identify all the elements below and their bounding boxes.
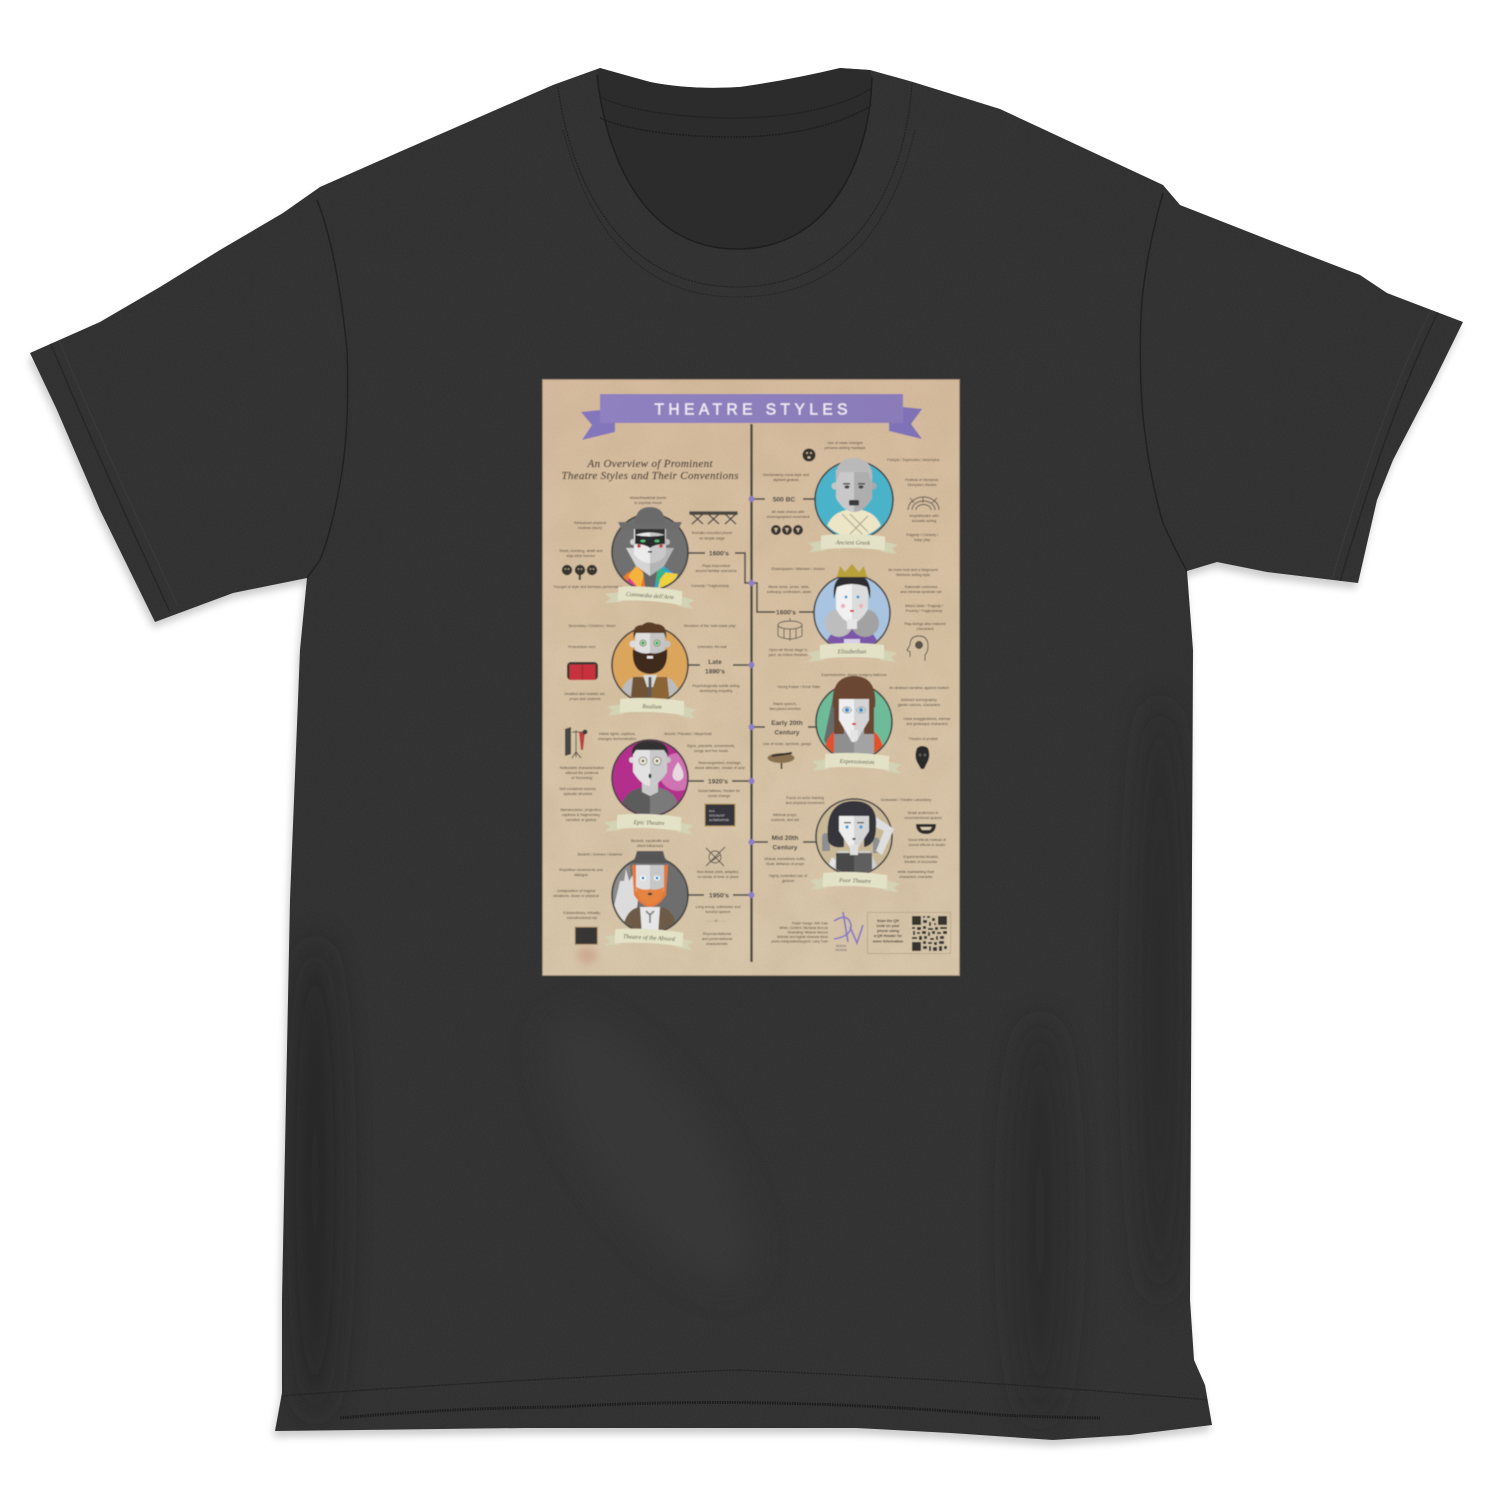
date labels: Mid 20th xyxy=(772,835,798,842)
text: realism conventions: Proscenium arch xyxy=(568,645,596,649)
text: expressionism conventions: Georg Kaiser / Ernst Toller xyxy=(777,685,821,689)
text: poor theatre conventions: while maintaining their xyxy=(898,870,935,874)
style: Poor Theatre xyxy=(816,799,894,877)
text: elizabethan conventions: characters xyxy=(916,627,934,631)
text: greek conventions: stylised gesture xyxy=(773,478,799,482)
icon: three masks xyxy=(562,565,597,580)
style: Commedia dell'Arte xyxy=(612,507,688,592)
text: realism conventions: Secondary / Chekhov / Ibsen xyxy=(568,624,616,628)
text: realism conventions xyxy=(564,624,739,701)
date labels xyxy=(705,496,803,900)
text: greek conventions: Festival of Dionysus; xyxy=(905,478,939,482)
subtitle: An Overview of Prominent xyxy=(586,458,713,470)
text: commedia conventions: slap-stick humour xyxy=(567,554,596,558)
style: Ancient Greek xyxy=(815,458,893,540)
text: epic conventions: Narrator/actor, projection, xyxy=(560,808,602,812)
ribbon: Realism: Realism xyxy=(641,704,662,711)
text: greek conventions: choreographed movement xyxy=(766,515,810,519)
text: absurd conventions: silent influences xyxy=(637,844,663,848)
date labels: Century xyxy=(773,844,798,852)
ribbon: Ancient Greek xyxy=(808,533,898,554)
credits: Poster Design: Will Tuan xyxy=(792,922,828,926)
text: epic conventions xyxy=(559,732,746,822)
text: poor theatre conventions: Grotowski / Theatre Laboratory xyxy=(881,798,932,802)
text: absurd conventions: characteristic xyxy=(706,942,728,946)
text: absurd conventions: - - - - /// - - - - xyxy=(705,919,727,923)
text: expressionism conventions xyxy=(763,685,950,746)
QR panel xyxy=(868,912,950,954)
text: expressionism conventions: fast-paced emotion xyxy=(769,707,801,711)
text: epic conventions: Rearrangement, montage, xyxy=(698,761,742,765)
text: absurd conventions: no sense of time or place xyxy=(697,875,739,879)
logo: drama victoria: drama xyxy=(836,944,846,948)
text: commedia conventions: Rehearsed physical xyxy=(574,521,606,525)
date labels: 1950's xyxy=(709,892,729,900)
text: epic conventions: narrative or gestus xyxy=(566,818,596,822)
date labels: 1600's xyxy=(709,550,729,558)
QR instructions: a QR Reader for xyxy=(874,934,903,938)
text: absurd conventions: Beckett, vaudeville and xyxy=(631,839,669,843)
ribbon: Poor Theatre: Poor Theatre xyxy=(838,878,871,885)
icon: blackboard: ALTERNATIVE xyxy=(709,818,729,822)
ribbon: Epic Theatre: Epic Theatre xyxy=(632,820,665,827)
text: poor theatre conventions: sound effects in studio xyxy=(909,843,945,847)
timeline xyxy=(688,424,816,962)
text: epic conventions: Visible lights, captions, xyxy=(598,732,636,736)
date labels: 500 BC xyxy=(773,496,795,504)
style: Expressionism xyxy=(816,676,892,762)
text: epic conventions: Signs, placards, screenshots, xyxy=(687,744,735,748)
icon: black curtain xyxy=(575,927,598,944)
stage icon: trestle xyxy=(690,512,737,524)
text: epic conventions: songs and live music xyxy=(694,749,728,753)
text: poor theatre conventions: Minimal props, xyxy=(773,813,797,817)
ribbon: Theatre of the Absurd xyxy=(604,927,694,950)
logo: drama victoria: victoria xyxy=(835,948,847,952)
text: greek conventions: Amphitheatre with xyxy=(909,514,939,518)
text: realism conventions: Psychologically subtle acting xyxy=(693,684,739,688)
text: elizabethan conventions: Elaborate costumes xyxy=(905,585,937,589)
ribbon: Expressionism xyxy=(812,751,902,774)
text: elizabethan conventions: Blank verse, prose, wide, xyxy=(768,585,810,589)
text: elizabethan conventions: As more rock and a fairground xyxy=(888,568,938,572)
text: greek conventions: Dionysia's theatre xyxy=(907,483,937,487)
icon: mouth xyxy=(916,824,936,834)
text: absurd conventions: forceful speech xyxy=(705,910,731,914)
style: Elizabethan xyxy=(814,564,890,653)
text: poor theatre conventions: costume, and set xyxy=(771,818,799,822)
icon: red curtain xyxy=(567,662,598,680)
text: commedia conventions: Bunraku mounted phone xyxy=(692,531,732,535)
text: epic conventions: shock attitudes, 'choice of acts' xyxy=(695,766,746,770)
text: epic conventions: episodic structure xyxy=(564,792,592,796)
icon: gong xyxy=(768,753,794,769)
icon: greek masks xyxy=(771,525,803,535)
text: poor theatre conventions: characters character xyxy=(899,875,934,879)
text: expressionism conventions: Clear exaggerations, intense xyxy=(904,717,950,721)
text: commedia conventions: Stock, mocking, death and xyxy=(559,549,603,553)
text: epic conventions: Social tableau; theatre for xyxy=(698,789,741,793)
icon: tragic mask xyxy=(802,448,816,462)
logo: drama victoria xyxy=(834,912,863,952)
title banner xyxy=(581,394,922,440)
credits: Website and logistic Amanda Moss xyxy=(777,935,828,939)
style: Theatre of the Absurd xyxy=(612,851,688,935)
poster xyxy=(542,379,960,976)
ribbon: Ancient Greek: Ancient Greek xyxy=(835,540,871,547)
text: absurd conventions: Extraordinary, virtually; xyxy=(563,911,601,915)
text: poor theatre conventions: Small audiences in xyxy=(908,811,938,815)
style: Epic Theatre xyxy=(612,740,697,818)
text: elizabethan conventions: and minimal symbolic set xyxy=(900,590,942,594)
text: poor theatre conventions: unconventional spaces xyxy=(904,816,942,820)
text: expressionism conventions: An abstract narrative against realism xyxy=(889,686,949,690)
ribbon: Commedia dell'Arte xyxy=(604,584,696,609)
icon: coat rack xyxy=(565,727,587,758)
icon: amphitheatre xyxy=(908,497,939,510)
ribbon: Theatre of the Absurd: Theatre of the Absurd xyxy=(623,933,676,943)
text: elizabethan conventions xyxy=(767,567,946,677)
text: commedia conventions: Plays improvised xyxy=(702,564,730,568)
text: elizabethan conventions: Play-beings also matured xyxy=(904,622,946,626)
text: poor theatre conventions: theatre of encounter xyxy=(904,860,938,864)
icon: blackboard: SOCIALIST xyxy=(709,814,725,818)
text: poor theatre conventions: and physical movement xyxy=(786,801,824,805)
date labels: 1920's xyxy=(708,778,728,786)
text: absurd conventions: situations, clown or physical xyxy=(553,894,599,898)
text: commedia conventions: Thought of style and formless performance xyxy=(553,585,623,589)
icon: blackboard xyxy=(705,804,735,826)
text: realism conventions: Unbroken 4th wall xyxy=(697,645,727,649)
ribbon: Poor Theatre xyxy=(810,870,900,893)
text: absurd conventions: and presentational xyxy=(702,937,732,941)
text: epic conventions: Noticeable characterisation xyxy=(560,766,604,770)
text: poor theatre conventions: ritual, defiance of props xyxy=(766,862,804,866)
text: expressionism conventions: garish colours, characters xyxy=(898,703,940,707)
text: elizabethan conventions: Expressionism, dream imagery balloons xyxy=(821,673,887,677)
QR instructions: code on your xyxy=(876,924,900,928)
text: realism conventions: props and costume xyxy=(569,697,601,701)
subtitle: Theatre Styles and Their Conventions xyxy=(562,470,738,482)
text: absurd conventions xyxy=(553,839,740,946)
ribbon: Epic Theatre xyxy=(604,812,694,835)
poster paper xyxy=(542,379,960,976)
text: greek conventions xyxy=(763,441,940,542)
text: greek conventions: Declamatory vocal style and xyxy=(763,473,809,477)
text: expressionism conventions: and grotesque characters xyxy=(906,722,948,726)
icon: black skull xyxy=(916,746,929,769)
text: commedia conventions: around familiar scenarios xyxy=(695,569,737,573)
credits: photo manipulated/support: Larry Tuan xyxy=(771,940,828,944)
icon: crossed clock xyxy=(706,847,725,866)
text: absurd conventions: Long wordy, unfinished and xyxy=(696,905,740,909)
icon: head with gear xyxy=(907,636,928,661)
text: poor theatre conventions: Highly controlled use of xyxy=(769,874,808,878)
text: elizabethan conventions: Mixed class / Tragedy / xyxy=(905,604,944,608)
text: absurd conventions: Repetitive movements and xyxy=(559,868,603,872)
text: expressionism conventions: Theatre of protest xyxy=(908,737,938,741)
QR instructions: phone using xyxy=(877,929,899,933)
text: realism conventions: Detailed and realistic set, xyxy=(564,692,606,696)
text: realism conventions: Structure of the 'well-made play' xyxy=(684,624,736,628)
text: expressionism conventions: Use of noise, symbols, gongs xyxy=(763,742,811,746)
text: greek conventions: acoustic acting xyxy=(912,519,936,523)
date labels: Century xyxy=(775,730,800,736)
text: poor theatre conventions xyxy=(764,796,947,883)
QR instructions: more information xyxy=(873,940,904,944)
text: commedia conventions: Comedy / Tragicomedy xyxy=(691,584,729,588)
ribbon: Realism xyxy=(607,696,697,719)
text: commedia conventions: routines (lazzi) xyxy=(578,526,602,530)
date labels: 1600's xyxy=(776,610,796,616)
subtitle xyxy=(562,458,738,482)
text: poor theatre conventions: Mutual, sometimes buffo, xyxy=(764,857,806,861)
text: epic conventions: captions & fragmentary xyxy=(562,813,600,817)
ribbon: Elizabethan: Elizabethan xyxy=(837,650,866,656)
text: greek conventions: All male chorus with xyxy=(772,510,804,514)
text: epic conventions: social change xyxy=(708,794,730,798)
text: elizabethan conventions: Poverty / Tragicomedy xyxy=(906,609,942,613)
text: elizabethan conventions: yard, an indoor theatres xyxy=(769,653,808,657)
ribbon: Expressionism: Expressionism xyxy=(838,759,875,766)
text: elizabethan conventions: Shakespeare / Marlowe / Jonson xyxy=(771,567,825,571)
text: greek conventions: Tragedy / Comedy / xyxy=(906,533,939,537)
text: greek conventions: Thespis / Sophocles / Aeschylus xyxy=(887,458,940,462)
text: commedia conventions: to express mood xyxy=(634,501,662,505)
text: greek conventions: persona adding mystique xyxy=(824,446,866,450)
text: elizabethan conventions: soliloquy, confession, wider xyxy=(767,590,812,594)
credits xyxy=(771,922,828,944)
QR instructions: Scan the QR xyxy=(877,919,899,923)
text: elizabethan conventions: histrionic acting style xyxy=(896,573,930,577)
credits: Writer, Content: Michaela Morcos xyxy=(779,926,828,930)
credits: Illustrating: Melanie Morcos xyxy=(788,930,828,934)
icon: globe theatre xyxy=(778,618,802,641)
text: absurd conventions: Beckett / Ionesco / Adamov xyxy=(578,852,622,856)
text: absurd conventions: monotheatrical set xyxy=(567,916,597,920)
text: greek conventions: Satyr play xyxy=(914,538,930,542)
text: poor theatre conventions: gesture xyxy=(782,879,794,883)
text: expressionism conventions: Rapid speech, xyxy=(773,702,797,706)
text: epic conventions: changes demonstration xyxy=(598,737,636,741)
QR code xyxy=(912,916,947,951)
QR instructions xyxy=(873,919,904,944)
text: poor theatre conventions: Focus on actor training xyxy=(786,796,824,800)
date labels: Late xyxy=(708,659,722,666)
text: elizabethan conventions: Open-air thrust stage in xyxy=(769,648,807,652)
text: poor theatre conventions: Experimental Models; xyxy=(903,855,939,859)
text: expressionism conventions: Abstract scenography, xyxy=(901,698,937,702)
text: absurd conventions: dialogue xyxy=(574,873,588,877)
text: absurd conventions: Juxtaposition of tragical xyxy=(557,889,595,893)
text: absurd conventions: Representational xyxy=(703,932,731,936)
style: Realism xyxy=(612,622,688,705)
text: poor theatre conventions: Vocal effects instead of xyxy=(908,838,947,842)
text: commedia conventions: on simple stage xyxy=(699,536,725,540)
text: commedia conventions: Music/theatrical stunts xyxy=(630,496,666,500)
text: commedia conventions xyxy=(553,496,737,589)
text: greek conventions: Use of mask changes xyxy=(827,441,863,445)
text: epic conventions: without the pretence xyxy=(565,771,599,775)
text: epic conventions: of 'becoming' xyxy=(571,776,593,780)
text: realism conventions: developing empathy xyxy=(699,689,733,693)
date labels: 1890's xyxy=(705,668,725,676)
banner title text: THEATRE STYLES xyxy=(654,402,848,418)
date labels: Early 20th xyxy=(771,720,803,727)
text: epic conventions: Brecht / Piscator / Meyerhold xyxy=(664,732,712,736)
ribbon: Commedia dell'Arte: Commedia dell'Arte xyxy=(626,592,675,601)
icon: blackboard: IN A xyxy=(709,809,715,813)
text: epic conventions: Self-contained scenes, xyxy=(559,787,597,791)
text: absurd conventions: Non-linear plots, adapted, xyxy=(697,870,739,874)
ribbon: Elizabethan xyxy=(807,643,897,662)
